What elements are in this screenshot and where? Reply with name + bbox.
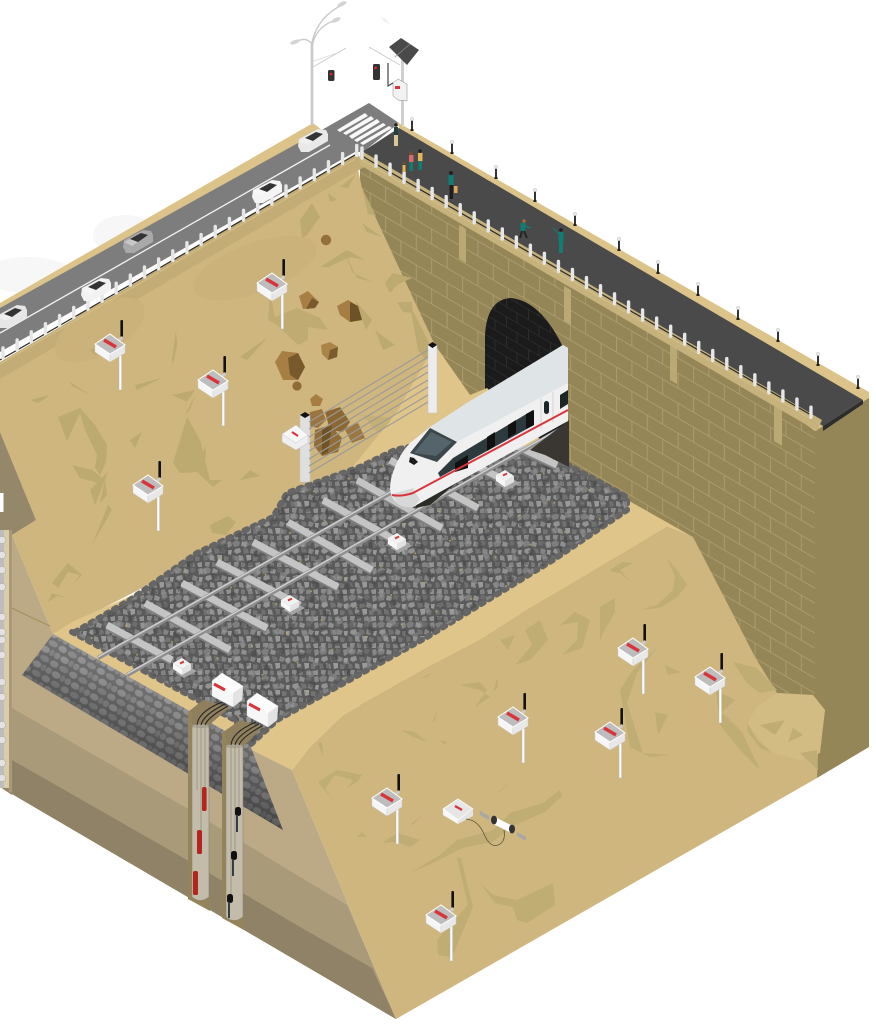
crack meter [443,799,526,846]
white box on column [0,493,4,512]
pedestrians [394,123,564,253]
fence rocks [308,407,365,456]
borehole logger box 2 [247,678,278,727]
high-speed train [390,345,568,508]
rockfall boulders [275,235,362,406]
asphalt footpath [362,128,863,426]
gabion embankment [22,634,283,830]
rock face facets [30,175,434,602]
road deck [0,103,869,431]
red stripe [392,410,568,496]
vehicles [0,129,328,328]
dark car [123,230,153,253]
borehole 2 [222,722,262,930]
railway tracks [98,424,568,675]
traffic lights [328,64,380,81]
street lamp [290,0,400,125]
boulder highlight [747,693,825,760]
tunnel floor shadow [530,420,569,467]
van [298,129,328,152]
wireless tilt sensors on stakes [95,259,725,961]
slope rock facets [318,558,818,957]
wall pilasters [459,225,782,446]
fence sensor [282,425,308,450]
borehole trenches [188,700,263,747]
background clouds [0,215,157,293]
right wall with brickwork [360,160,869,778]
footpath guard rail [362,148,811,419]
white car [252,180,282,203]
left column dark face [0,432,36,795]
fence post left [300,412,310,482]
rockfall fence [282,342,437,482]
white car [81,278,111,301]
monitoring station with solar panel [380,16,419,125]
nose shading [392,488,420,507]
railway sleepers [107,420,557,662]
crosswalk [337,113,392,145]
ballast bed [72,440,627,745]
centre line [0,145,330,333]
road guard rail [0,145,357,364]
footpath verge [397,122,869,431]
right slope [292,527,825,1019]
borehole logger box 1 [212,658,243,707]
fence post right [428,342,437,413]
borehole 1 [188,702,228,911]
left sensor column [0,493,12,792]
ballast mini sensors [173,470,520,678]
solar panel [389,38,419,65]
wall coping [360,150,822,431]
fence wires [309,350,428,473]
side windows [438,410,534,477]
soil strata cross-section [12,535,396,1019]
shade patches [45,222,325,376]
road verge [0,123,322,315]
outer edge bollards [410,117,860,389]
white car [0,305,27,328]
upper slope [0,153,470,634]
curb band below road [0,153,366,379]
windshield [410,428,457,462]
train roof [410,345,568,443]
tunnel opening [485,298,569,467]
data logger box [393,79,407,101]
cream ground band [53,345,693,770]
